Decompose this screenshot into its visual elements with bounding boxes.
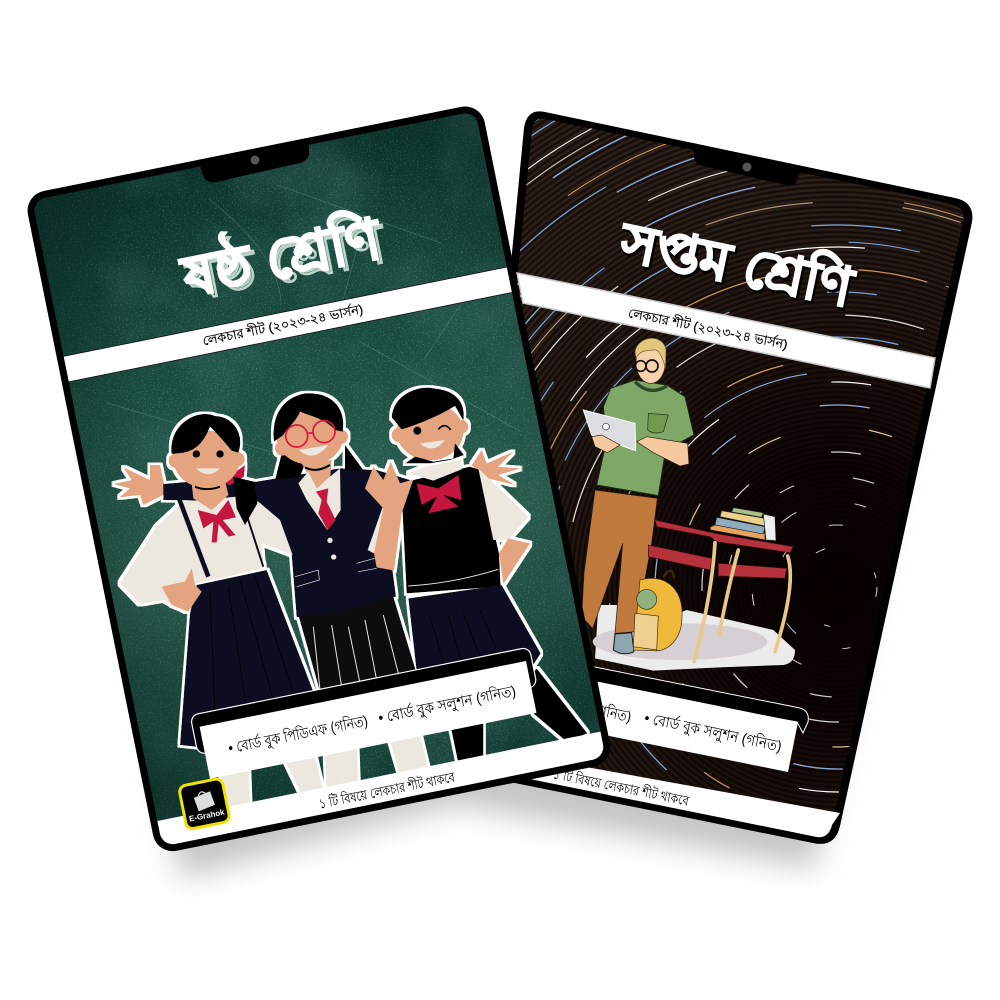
footer strip: left tablet xyxy=(151,730,614,855)
right sleeves xyxy=(368,468,528,554)
notch: left tablet xyxy=(198,138,309,182)
text: lecture sheet version: লেকচার শীট (২০২৩-২৪ ভার্সন) xyxy=(627,305,789,352)
raised hand arm xyxy=(365,462,413,571)
screen: green chalkboard xyxy=(24,103,614,855)
screen: star trail background xyxy=(517,118,964,837)
right vest xyxy=(402,467,501,593)
laptop xyxy=(583,410,636,451)
text: board book solution: • বোর্ড বুক সলুশন (গনিত) xyxy=(377,682,517,727)
text: book pdf partial: বোর্ড বুক পিডিএফ (গনিত) xyxy=(498,680,633,726)
backpack xyxy=(633,571,682,651)
illustration: student with desk xyxy=(582,338,795,671)
forearm xyxy=(637,437,689,466)
table top xyxy=(655,520,793,553)
neck and head xyxy=(636,342,665,383)
right collar xyxy=(408,459,462,481)
footer strip: right tablet xyxy=(470,746,840,837)
text: book solution: • বোর্ড বুক সলুশন (গনিত) xyxy=(643,709,783,756)
shoe xyxy=(613,633,634,654)
illustration: three students xyxy=(113,388,587,808)
pocket xyxy=(648,413,668,433)
scrunchie xyxy=(222,465,245,485)
box body xyxy=(200,661,536,779)
left hand xyxy=(113,465,164,505)
tie xyxy=(316,488,336,530)
faces details xyxy=(193,421,498,713)
middle head xyxy=(275,409,348,465)
thumb hand xyxy=(162,568,202,612)
heading: সপ্তম শ্রেণি: সপ্তম শ্রেণি xyxy=(614,209,860,319)
tablet: seventh grade (back) xyxy=(512,111,972,844)
left suspenders xyxy=(178,497,263,577)
heading: ষষ্ঠ শ্রেণি: ষষ্ঠ শ্রেণি xyxy=(179,206,393,314)
t-shirt xyxy=(597,380,694,496)
text: footer note right: ১ টি বিষয়ে লেকচার শীট থাকবে xyxy=(552,766,690,809)
box: book list bar xyxy=(560,660,808,733)
table rails xyxy=(648,545,787,578)
notch: right tablet xyxy=(693,143,801,185)
middle neck xyxy=(302,460,332,490)
text: board book pdf: • বোর্ড বুক পিডিএফ (গনিত) xyxy=(227,712,369,757)
right hair xyxy=(392,388,464,429)
box top bar xyxy=(190,647,537,755)
right arm xyxy=(499,538,530,584)
tablet body: right xyxy=(464,111,972,844)
middle skirt xyxy=(298,597,417,692)
left skirt xyxy=(180,570,313,747)
tablet: sixth grade (front) xyxy=(24,103,614,855)
heading: সপ্তম শ্রেণি: সপ্তম শ্রেণি xyxy=(615,211,862,321)
camera: right tablet xyxy=(742,162,752,172)
logo text: E-Grahok xyxy=(188,808,226,824)
black leg right xyxy=(530,668,587,742)
glasses xyxy=(635,360,658,372)
right skirt xyxy=(408,585,541,672)
middle pocket lines xyxy=(295,558,377,587)
middle collar xyxy=(298,468,341,530)
middle hair xyxy=(274,393,343,442)
right hand behind xyxy=(472,450,521,485)
left shirt xyxy=(120,497,293,612)
middle jacket xyxy=(163,468,410,617)
pigtail xyxy=(233,477,257,525)
books xyxy=(710,508,776,541)
right head xyxy=(392,403,468,460)
box: book list xyxy=(560,674,798,772)
shadow: under tablets xyxy=(90,200,930,878)
hand xyxy=(592,435,620,453)
laptop logo xyxy=(603,423,609,430)
heading: ষষ্ঠ শ্রেণি: ষষ্ঠ শ্রেণি xyxy=(174,202,388,310)
collar xyxy=(635,382,667,390)
floor shade xyxy=(593,623,767,660)
table legs xyxy=(694,543,790,662)
camera: left tablet xyxy=(250,156,260,164)
cream legs xyxy=(220,728,428,808)
band: version strip xyxy=(517,273,935,388)
black leg xyxy=(450,717,483,763)
icon: bag xyxy=(194,790,215,811)
hair curls xyxy=(405,443,464,463)
left head xyxy=(169,431,245,488)
band: version strip xyxy=(57,266,519,383)
left bow xyxy=(198,500,236,542)
text: footer note left: ১ টি বিষয়ে লেকচার শীট থাকবে xyxy=(318,769,456,812)
box: book list xyxy=(190,647,542,780)
text: lecture sheet version: লেকচার শীট (২০২৩-২৪ ভার্সন) xyxy=(201,301,364,348)
long hair middle xyxy=(275,445,363,480)
left hair xyxy=(171,414,240,454)
left neck xyxy=(192,480,228,510)
trousers xyxy=(582,490,657,633)
hair xyxy=(635,338,666,368)
right bow xyxy=(417,475,462,513)
floor xyxy=(595,605,795,671)
tablet body: left xyxy=(24,103,614,855)
jacket buttons xyxy=(327,538,336,560)
logo: E-Grahok xyxy=(178,778,230,830)
